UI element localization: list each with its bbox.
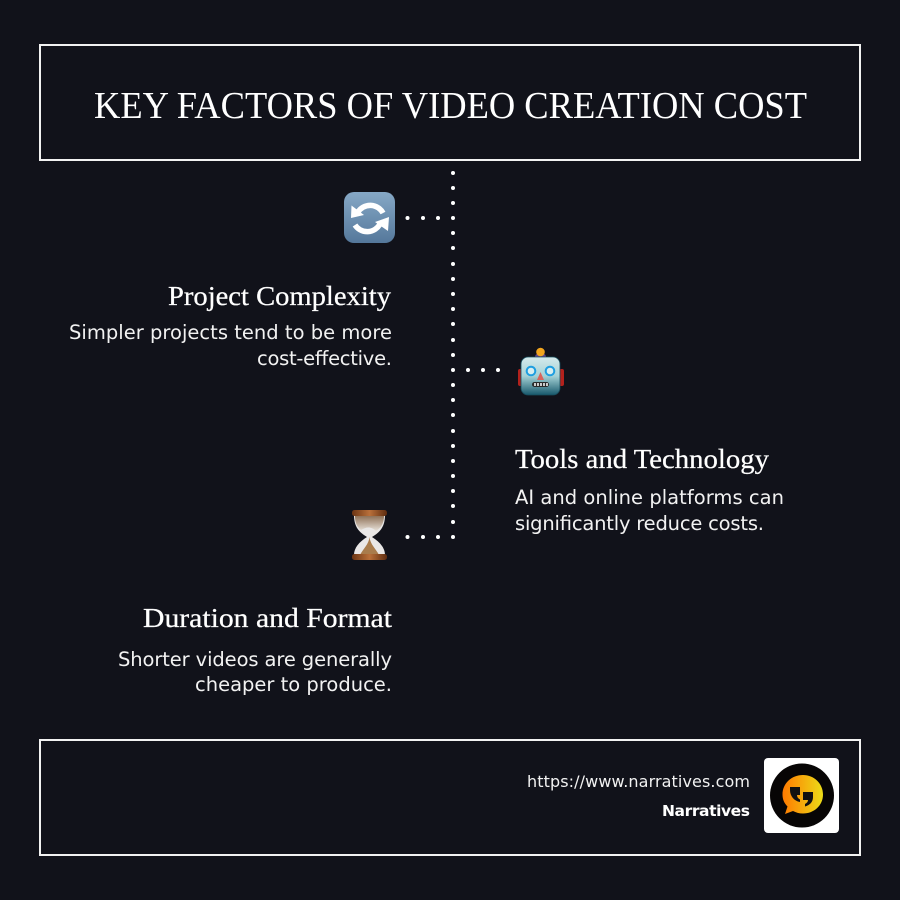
connector: duration and format [406,535,440,539]
description: duration and format: cheaper to produce. [195,673,392,696]
title panel [40,45,860,160]
description: project complexity [69,321,392,370]
icon: arrows in blue square [344,192,395,243]
footer panel [40,740,860,855]
icon: hourglass [352,510,387,560]
description: tools and technology: AI and online platforms can [515,486,784,509]
description: duration and format [118,648,392,696]
description: duration and format: Shorter videos are generally [118,648,392,671]
connector: project complexity [406,216,440,220]
description: project complexity: Simpler projects tend to be more [69,321,392,344]
text block: tools and technology [515,444,784,535]
footer url: https://www.narratives.com [527,772,750,791]
text block: project complexity [69,281,392,370]
title: KEY FACTORS OF VIDEO CREATION COST [94,85,807,127]
description: project complexity: cost-effective. [257,347,392,370]
icon: robot [518,348,564,395]
dotted timeline [451,171,455,539]
logo [764,758,839,833]
description: tools and technology [515,486,784,535]
description: tools and technology: significantly reduce costs. [515,512,764,535]
footer brand name: Narratives [662,802,750,820]
heading: tools and technology: Tools and Technology [515,444,770,474]
text block: duration and format [118,603,393,696]
heading: project complexity: Project Complexity [168,281,392,311]
heading: duration and format: Duration and Format [143,603,393,633]
connector: tools and technology [466,368,500,372]
